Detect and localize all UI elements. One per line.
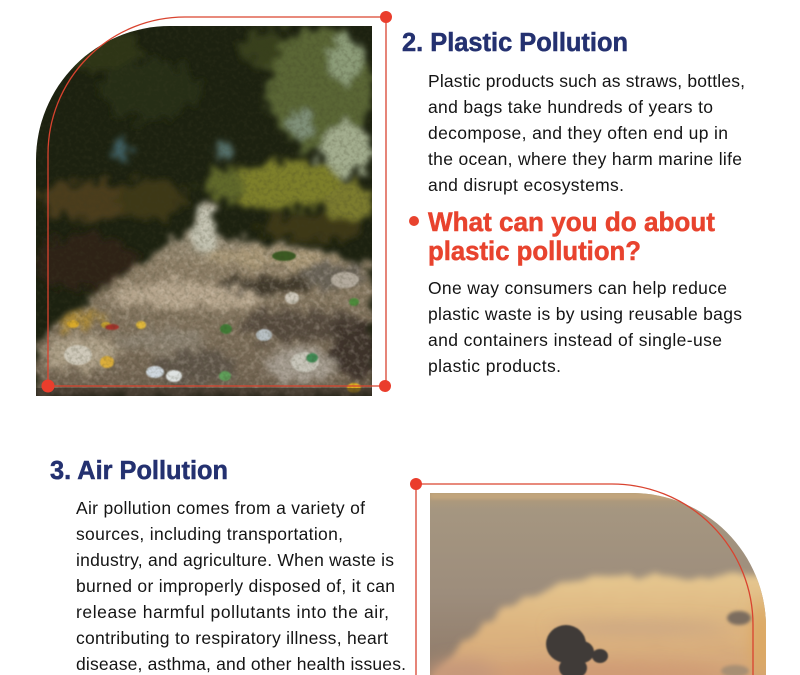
text block: consumer action [428,278,742,376]
text block: consumer action: and containers instead of single-use [428,330,722,350]
photo: smoke plume in sunset sky [420,493,775,675]
heading: air pollution: 3. Air Pollution [50,457,228,485]
text block: air pollution description [76,498,406,674]
subheading: what can you do [409,207,715,266]
decorative frame: plastic pollution photo [42,11,392,392]
text block: air pollution description: Air pollution comes from a variety of [76,498,365,518]
text block: air pollution description: release harmful pollutants into the air, [76,602,389,622]
text block: consumer action: One way consumers can help reduce [428,278,727,298]
text block: plastic pollution description: the ocean, where they harm marine life [428,149,742,169]
lower orange haze [426,600,772,675]
bullet [409,216,419,226]
litter bits [64,251,361,393]
text block: air pollution description: disease, asthma, and other health issues. [76,654,406,674]
text block: air pollution description: contributing to respiratory illness, heart [76,628,388,648]
text block: consumer action: plastic waste is by using reusable bags [428,304,742,324]
text block: air pollution description: burned or improperly disposed of, it can [76,576,395,596]
subheading: what can you do: What can you do about [428,207,715,237]
bottom shadow strip [36,388,372,396]
text block: consumer action: plastic products. [428,356,561,376]
foliage and sky patches [35,28,374,290]
text block: plastic pollution description: and disrupt ecosystems. [428,175,624,195]
ground litter field [36,195,379,396]
text block: plastic pollution description: Plastic products such as straws, bottles, [428,71,745,91]
photo: littered forest path [35,26,379,396]
subheading: what can you do: plastic pollution? [428,236,641,266]
smoke plume [546,625,608,675]
text block: air pollution description: sources, including transportation, [76,524,343,544]
marker dots [42,11,392,392]
text block: plastic pollution description: and bags take hundreds of years to [428,97,713,117]
decorative frame: air pollution photo [410,478,753,675]
distant smoke puffs [721,611,751,675]
text block: plastic pollution description [428,71,745,195]
sunlit cloud bank [420,572,775,675]
text block: air pollution description: industry, and agriculture. When waste is [76,550,394,570]
marker dot [410,478,422,490]
heading: plastic pollution: 2. Plastic Pollution [402,29,628,57]
text block: plastic pollution description: decompose, and they often end up in [428,123,728,143]
